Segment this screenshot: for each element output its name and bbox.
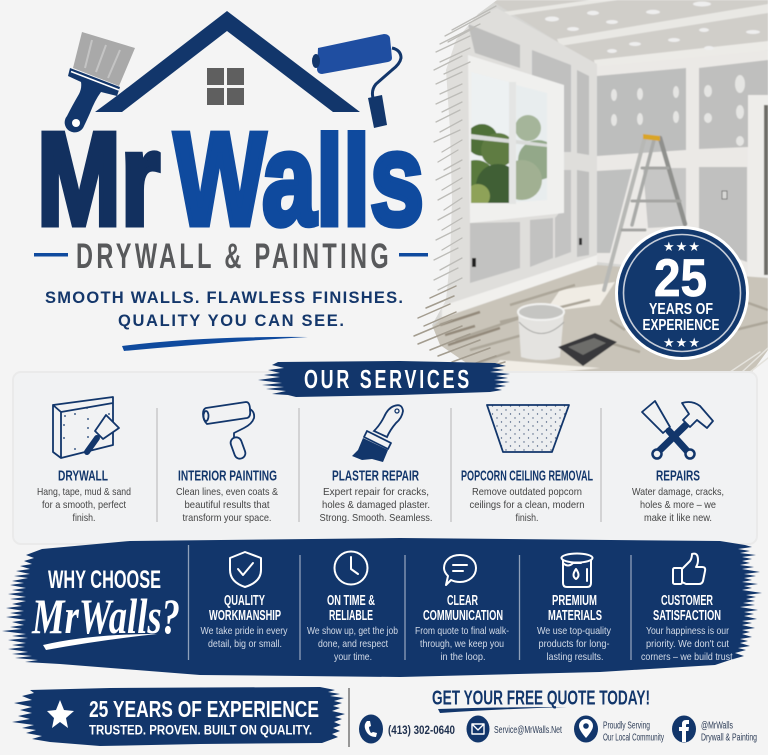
description	[641, 625, 735, 663]
title: REPAIRS	[656, 468, 700, 484]
tagline: QUALITY YOU CAN SEE.	[118, 312, 344, 330]
roof	[95, 11, 360, 112]
service: drywall	[37, 397, 131, 524]
description: We show up, get the job	[307, 625, 398, 637]
photo brush edge streaks	[414, 6, 768, 372]
footer divider	[348, 688, 350, 747]
wordmark: Mr	[37, 106, 160, 252]
service: popcorn ceiling removal	[461, 405, 593, 524]
panel: services	[13, 361, 757, 544]
icon: paint can	[562, 554, 592, 587]
why choose heading: MrWalls?	[31, 588, 180, 644]
description	[37, 486, 131, 524]
panel: experience banner	[12, 687, 345, 746]
description: finish.	[72, 512, 96, 524]
title: PLASTER REPAIR	[332, 468, 419, 484]
service: repairs	[632, 401, 724, 524]
description: your time.	[334, 651, 372, 663]
description: detail, big or small.	[208, 638, 282, 650]
description: Clean lines, even coats &	[176, 486, 278, 498]
icon: thumbs up	[673, 554, 705, 584]
description: Water damage, cracks,	[632, 486, 724, 498]
description	[632, 486, 724, 524]
description: We use top-quality	[537, 625, 612, 637]
description: done, and respect	[318, 638, 388, 650]
title: WORKMANSHIP	[209, 608, 281, 624]
description: holes & more – we	[640, 499, 716, 511]
left wall	[440, 8, 597, 322]
description	[470, 486, 585, 524]
tagline swoosh	[122, 337, 308, 351]
description: beautiful results that	[184, 499, 270, 511]
description: products for long-	[538, 638, 610, 650]
description: transform your space.	[182, 512, 272, 524]
title	[653, 593, 721, 624]
panel: why choose band	[2, 538, 762, 677]
services banner	[258, 361, 510, 397]
contact: phone: (413) 302-0640	[388, 723, 455, 737]
description: From quote to final walk-	[415, 625, 509, 637]
icon: shield	[230, 552, 261, 587]
description: finish.	[516, 512, 538, 524]
contact: service area	[574, 716, 664, 744]
reason: customer satisfaction	[641, 554, 735, 663]
band dividers	[188, 545, 631, 660]
service: interior painting	[176, 402, 278, 524]
description: make it like new.	[644, 512, 712, 524]
badge: 25 years of experience: EXPERIENCE	[642, 317, 720, 334]
contact: social	[672, 716, 757, 744]
reason: clear communication	[415, 555, 509, 663]
contact: service area: Our Local Community	[603, 732, 664, 744]
icon: hammer and scraper	[642, 401, 713, 458]
description	[176, 486, 278, 524]
tagline	[45, 289, 403, 351]
description	[200, 625, 288, 650]
title: RELIABLE	[329, 608, 373, 624]
description: priority. We don't cut	[646, 638, 729, 650]
services banner: OUR SERVICES	[304, 364, 472, 394]
wordmark: Walls	[174, 106, 424, 252]
contact: social: @MrWalls	[701, 720, 733, 732]
icon: plaster brush	[352, 405, 403, 462]
why choose heading: WHY CHOOSE	[48, 566, 161, 594]
panel: room photo	[418, 0, 768, 372]
badge bottom stars: ★★★	[663, 335, 701, 350]
service: plaster repair	[320, 405, 432, 524]
tagline: SMOOTH WALLS. FLAWLESS FINISHES.	[45, 289, 403, 307]
description: Strong. Smooth. Seamless.	[320, 512, 432, 524]
description: Your happiness is our	[646, 625, 729, 637]
title	[548, 593, 602, 624]
ladder	[604, 134, 685, 290]
title: PREMIUM	[552, 593, 597, 609]
why choose heading	[31, 566, 180, 650]
title: COMMUNICATION	[423, 608, 503, 624]
title: ON TIME &	[327, 593, 375, 609]
contact: email: Service@MrWalls.Net	[494, 724, 562, 736]
description: We take pride in every	[200, 625, 288, 637]
badge caption: YEARS OF	[649, 301, 713, 318]
badge: 25 years of experience	[615, 226, 749, 360]
icon: textured ceiling	[487, 405, 569, 452]
title: DRYWALL	[58, 468, 108, 484]
description: ceilings for a clean, modern	[470, 499, 585, 511]
call to action	[432, 688, 650, 713]
title: MATERIALS	[548, 608, 602, 624]
title: CUSTOMER	[661, 593, 713, 609]
panel: contact	[359, 688, 757, 744]
contact: phone	[359, 714, 455, 744]
bucket	[518, 304, 564, 360]
title: INTERIOR PAINTING	[178, 468, 277, 484]
reason: on time and reliable	[307, 552, 398, 663]
description: lasting results.	[546, 651, 604, 663]
banner headline: 25 YEARS OF EXPERIENCE	[89, 696, 319, 722]
description: holes & damaged plaster.	[322, 499, 430, 511]
description: Hang, tape, mud & sand	[37, 486, 131, 498]
title: POPCORN CEILING REMOVAL	[461, 468, 593, 484]
attic window	[207, 68, 244, 105]
description: Remove outdated popcorn	[472, 486, 582, 498]
logo	[34, 11, 428, 276]
contact: service area: Proudly Serving	[603, 720, 650, 732]
description: in the loop.	[440, 651, 486, 663]
banner subline: TRUSTED. PROVEN. BUILT ON QUALITY.	[89, 722, 312, 738]
description: through, we keep you	[420, 638, 504, 650]
description: for a smooth, perfect	[42, 499, 126, 511]
icon: star	[47, 700, 74, 728]
icon: roller	[203, 402, 254, 460]
right wall panels and door	[597, 50, 768, 280]
reason: premium materials	[537, 554, 612, 663]
paint tray	[558, 333, 617, 366]
title: SATISFACTION	[653, 608, 721, 624]
wordmark	[41, 130, 422, 229]
call to action: GET YOUR FREE QUOTE TODAY!	[432, 688, 650, 710]
icon: paint roller	[312, 34, 401, 128]
service dividers	[157, 408, 601, 522]
badge top stars: ★★★	[663, 239, 701, 254]
floor	[418, 265, 768, 372]
icon: speech bubble	[444, 555, 476, 585]
description	[307, 625, 398, 663]
icon: clock	[334, 552, 368, 584]
title: CLEAR	[447, 593, 478, 609]
title	[327, 593, 375, 624]
window	[468, 55, 564, 223]
icon: drywall board and scraper	[53, 397, 119, 458]
title	[209, 593, 281, 624]
reason: quality workmanship	[200, 552, 288, 650]
description	[415, 625, 509, 663]
badge number: 25	[654, 249, 707, 308]
description	[537, 625, 612, 663]
title: QUALITY	[224, 593, 265, 609]
description: corners – we build trust.	[641, 651, 735, 663]
icon: paint brush	[65, 32, 135, 132]
description	[320, 486, 432, 524]
title	[423, 593, 503, 624]
description: Expert repair for cracks,	[323, 486, 429, 498]
contact: email	[466, 716, 562, 742]
ceiling	[490, 0, 768, 72]
subtitle: DRYWALL & PAINTING	[76, 237, 392, 276]
